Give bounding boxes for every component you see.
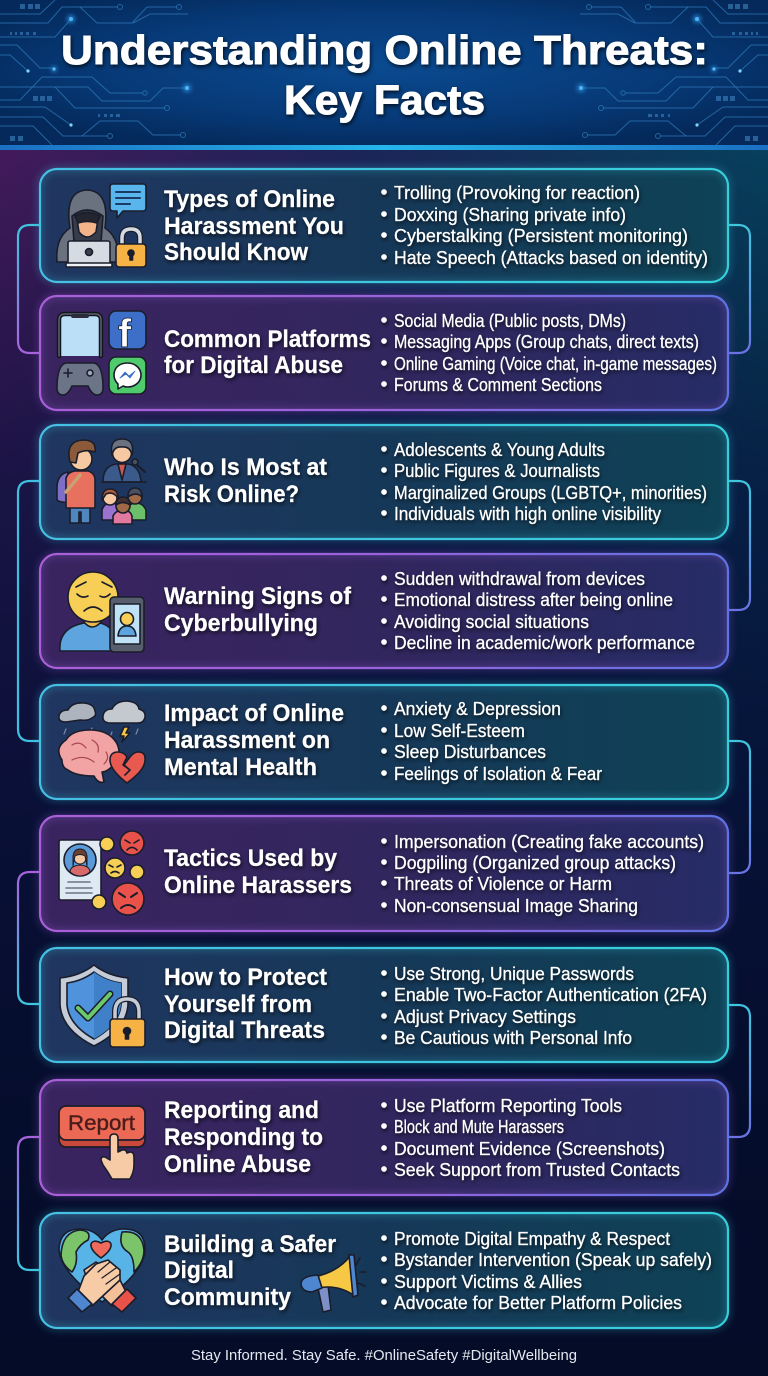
bullet list: Forums & Comment Sections [394,375,602,395]
icon: heart globe with joined hands [59,1229,145,1312]
title: Key Facts [284,77,485,123]
heading: Tactics Used by [164,845,337,872]
heading: Yourself from [164,991,312,1018]
bullet list: Messaging Apps (Group chats, direct texts) [394,332,699,352]
bullet list: Use Strong, Unique Passwords [394,964,634,984]
connector: left panels 3 to 5 [18,481,40,741]
heading: Cyberbullying [164,610,318,637]
heading [164,700,344,781]
bullet list: Impersonation (Creating fake accounts) [394,832,704,852]
heading: for Digital Abuse [164,352,343,379]
bullet list [381,832,704,916]
icon: phone, social apps, gamepad: f [118,312,132,356]
bullet list: Cyberstalking (Persistent monitoring) [394,226,688,246]
heading: Digital Threats [164,1017,325,1044]
heading: Impact of Online [164,700,344,727]
icon: report button with hand: Report [68,1112,135,1135]
icon: sad face with phone [60,572,144,652]
bullet list: Emotional distress after being online [394,590,673,610]
bullet list [381,440,707,524]
heading: Online Abuse [164,1151,311,1178]
connector: right panels 5 to 6 [728,741,750,873]
icon: megaphone [301,1255,366,1312]
heading: How to Protect [164,964,327,991]
bullet list: Sleep Disturbances [394,742,546,762]
heading: Building a Safer [164,1231,336,1258]
bullet list: Dogpiling (Organized group attacks) [394,853,676,873]
icon: shield with check and lock [60,965,145,1047]
heading [164,1097,323,1178]
connector: left panels 8 to 9 [18,1137,40,1270]
bullet list: Block and Mute Harassers [394,1117,564,1137]
bullet list: Individuals with high online visibility [394,504,661,524]
panel: impact on mental health [40,685,728,799]
bullet list: Social Media (Public posts, DMs) [394,311,626,331]
heading: Types of Online [164,186,335,213]
icon: report button with hand [59,1106,145,1179]
bullet list: Bystander Intervention (Speak up safely) [394,1250,712,1270]
icon: young person, public figure, group [57,439,146,524]
bullet list: Decline in academic/work performance [394,633,695,653]
panel: how to protect [40,948,728,1062]
heading: Reporting and [164,1097,319,1124]
panel: warning signs [40,554,728,668]
heading: Warning Signs of [164,583,352,610]
bullet list [381,699,602,784]
panel: building a safer community [40,1213,728,1328]
bullet list: Sudden withdrawal from devices [394,569,645,589]
bullet list: Be Cautious with Personal Info [394,1028,632,1048]
header band [0,0,768,150]
bullet list: Public Figures & Journalists [394,461,600,481]
connector: right panels 7 to 8 [728,1005,750,1137]
connector: left panels 1 to 2 [18,225,40,353]
bullet list: Trolling (Provoking for reaction) [394,183,640,203]
bullet list: Seek Support from Trusted Contacts [394,1160,680,1180]
heading: Should Know [164,239,309,266]
bullet list: Promote Digital Empathy & Respect [394,1229,670,1249]
panel: common platforms [40,296,728,410]
heading: Responding to [164,1124,323,1151]
heading: Common Platforms [164,326,371,353]
title: Understanding Online Threats: [61,27,708,73]
icon: phone, social apps, gamepad [57,311,146,395]
heading [164,845,352,899]
bullet list: Avoiding social situations [394,612,589,632]
bullet list [381,1096,680,1180]
bullet list: Hate Speech (Attacks based on identity) [394,248,708,268]
heading: Harassment You [164,213,344,240]
bullet list: Enable Two-Factor Authentication (2FA) [394,985,707,1005]
heading: Harassment on [164,727,330,754]
bullet list [381,1229,712,1313]
heading [164,454,327,508]
bullet list: Document Evidence (Screenshots) [394,1139,665,1159]
panel: who is most at risk [40,425,728,539]
icon: storm clouds, brain, broken heart [59,701,145,783]
bullet list: Low Self-Esteem [394,721,525,741]
heading: Risk Online? [164,481,299,508]
heading [164,326,371,379]
bullet list: Non-consensual Image Sharing [394,896,638,916]
bullet list: Use Platform Reporting Tools [394,1096,622,1116]
heading [164,964,327,1044]
panel: tactics used [40,816,728,931]
heading: Online Harassers [164,872,352,899]
bullet list: Marginalized Groups (LGBTQ+, minorities) [394,483,707,503]
heading [164,186,344,266]
bullet list: Doxxing (Sharing private info) [394,205,626,225]
heading: Mental Health [164,754,317,781]
bullet list [381,311,717,395]
bullet list: Advocate for Better Platform Policies [394,1293,682,1313]
bullet list: Adjust Privacy Settings [394,1007,576,1027]
connector: left panels 6 to 7 [18,872,40,1004]
bullet list [381,183,708,268]
heading: Digital [164,1257,234,1284]
panel: reporting and responding [40,1080,728,1195]
heading: Community [164,1284,291,1311]
panel: types of online harassment [40,169,728,282]
bullet list: Threats of Violence or Harm [394,874,612,894]
bullet list [381,964,707,1048]
bullet list: Anxiety & Depression [394,699,561,719]
icon: hooded hacker with chat and lock [57,184,146,267]
title [61,27,708,123]
connector: right panels 3 to 4 [728,481,750,610]
footer: Stay Informed. Stay Safe. #OnlineSafety #DigitalWellbeing [191,1347,577,1364]
bullet list: Support Victims & Allies [394,1272,582,1292]
heading [164,1231,336,1311]
connector: right panels 1 to 2 [728,225,750,353]
bullet list [381,569,695,653]
icon: fake profile with angry emojis [59,831,144,915]
bullet list: Adolescents & Young Adults [394,440,605,460]
heading: Who Is Most at [164,454,327,481]
bullet list: Online Gaming (Voice chat, in-game messages) [394,354,717,374]
bullet list: Feelings of Isolation & Fear [394,764,602,784]
heading [164,583,352,637]
